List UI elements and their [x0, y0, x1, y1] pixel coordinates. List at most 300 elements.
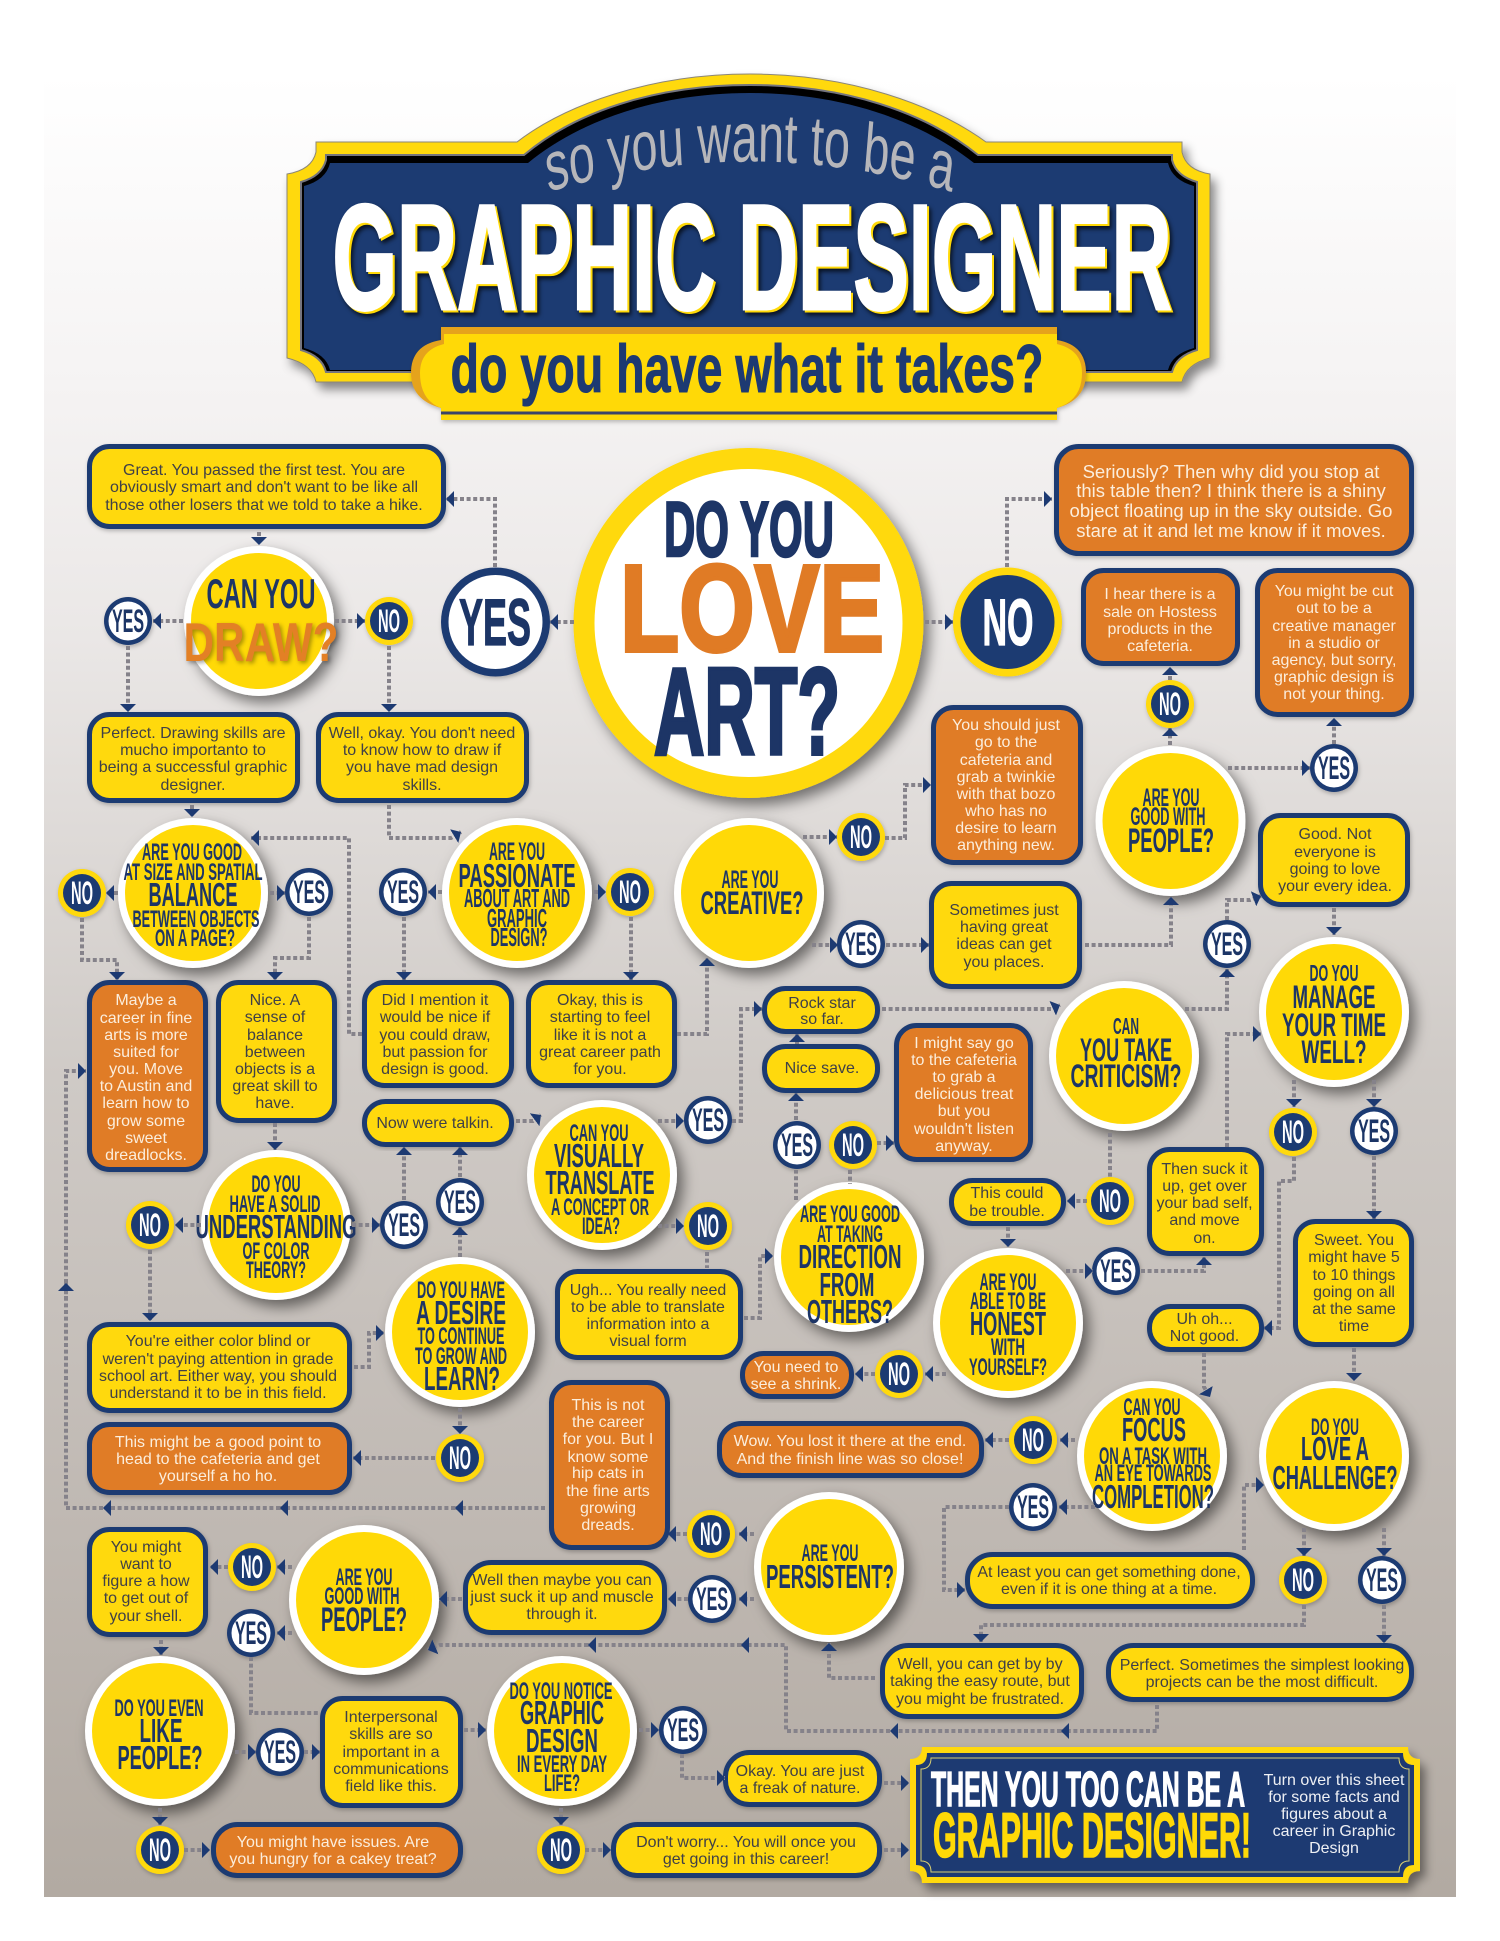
- box: sweet: [1296, 1222, 1412, 1344]
- answers: small no circles: [58, 597, 1327, 1874]
- question: visually translate: VISUALLY: [554, 1137, 644, 1174]
- answers: small no circles: NO: [149, 1832, 171, 1868]
- main circle: do you love art: ART?: [654, 644, 840, 781]
- box: seriously: object floating up in the sky outside. Go: [1070, 500, 1392, 521]
- box: now were talkin: [364, 1102, 512, 1144]
- box: this is not the career: This is not: [572, 1397, 645, 1414]
- answers: small yes circles: YES: [696, 1581, 728, 1617]
- main circle: do you love art: DO YOU: [664, 485, 834, 573]
- question: good with people 2: PEOPLE?: [321, 1601, 407, 1639]
- question: desire: [385, 1257, 535, 1407]
- question: persistent: PERSISTENT?: [766, 1558, 894, 1595]
- box: then suck it up: on.: [1193, 1230, 1216, 1247]
- big answer: yes: [441, 568, 550, 676]
- ribbon: do you have what it takes: [411, 327, 1086, 420]
- question: balance: ARE YOU GOOD: [142, 839, 242, 866]
- box: you should just: grab a twinkie: [957, 769, 1055, 786]
- question: do you even like people: DO YOU EVEN: [114, 1695, 204, 1722]
- box: you should just: cafeteria and: [960, 752, 1052, 769]
- question: creative: ARE YOU: [722, 866, 778, 894]
- question: good with people: GOOD WITH: [1130, 803, 1206, 831]
- question: honest: HONEST: [970, 1305, 1046, 1342]
- question: good with people: ARE YOU: [1142, 784, 1200, 812]
- box: i might say: I might say go: [914, 1035, 1014, 1052]
- box: okay just a freak: Okay. You are just: [736, 1763, 865, 1780]
- main circle: do you love art: [574, 448, 924, 798]
- box: rock star: so far.: [800, 1011, 844, 1028]
- question: focus: AN EYE TOWARDS: [1094, 1460, 1212, 1487]
- big answer: no: NO: [982, 585, 1034, 659]
- box: ugh: Ugh... You really need: [570, 1282, 726, 1299]
- box: don't worry: Don't worry... You will once you: [636, 1834, 856, 1851]
- box: i hear: products in the: [1108, 621, 1213, 638]
- box: maybe a career: Maybe a: [115, 992, 177, 1009]
- box: uh oh: Uh oh...: [1176, 1311, 1233, 1328]
- box: ugh: visual form: [609, 1333, 687, 1350]
- final banner: career in Graphic: [1273, 1823, 1395, 1840]
- box: sweet: at the same: [1312, 1301, 1396, 1318]
- box: i might say: anyway.: [935, 1138, 993, 1155]
- box: uh oh: Not good.: [1170, 1328, 1239, 1345]
- big answer: yes: YES: [459, 585, 531, 659]
- question: understanding: THEORY?: [246, 1257, 306, 1284]
- question: notice graphic design: DESIGN: [526, 1722, 598, 1759]
- box: this might be a good point: [90, 1424, 350, 1492]
- question: visually translate: IDEA?: [582, 1213, 620, 1240]
- box: i might say: to grab a: [932, 1069, 996, 1086]
- question: direction: AT TAKING: [817, 1221, 883, 1248]
- box: did i mention: would be nice if: [379, 1009, 491, 1026]
- answers: small yes circles: YES: [388, 1207, 420, 1243]
- box: sweet: might have 5: [1308, 1249, 1400, 1266]
- box: you might be cut: out to be a: [1296, 600, 1372, 617]
- answers: small no circles: NO: [1292, 1562, 1314, 1598]
- question: visually translate: A CONCEPT OR: [551, 1194, 649, 1221]
- final banner: for some facts and: [1268, 1789, 1400, 1806]
- box: you might be cut: not your thing.: [1283, 686, 1385, 703]
- box: well you can get by: [882, 1646, 1082, 1716]
- box: i hear: sale on Hostess: [1103, 604, 1217, 621]
- box: maybe a career: you. Move: [109, 1061, 183, 1078]
- question: passionate: [442, 818, 592, 968]
- answers: small no circles: NO: [842, 1127, 864, 1163]
- box: well okay: to know how to draw if: [343, 742, 502, 759]
- box: you're either color blind: [90, 1324, 350, 1410]
- box: maybe a career: to Austin and: [100, 1078, 192, 1095]
- box: you're either color blind: understand it to be in this field.: [109, 1385, 327, 1402]
- text: so you want to be a: so you want to be a: [546, 118, 952, 192]
- box: interpersonal skills: important in a: [343, 1744, 440, 1761]
- box: nice save: Nice save.: [785, 1060, 859, 1077]
- box: well you can get by: you might be frustrated.: [896, 1691, 1064, 1708]
- box: okay this is starting: for you.: [573, 1061, 627, 1078]
- answers: small no circles: NO: [71, 875, 93, 911]
- answers: small no circles: NO: [1099, 1183, 1121, 1219]
- question: passionate: GRAPHIC: [487, 903, 547, 933]
- question: criticism: CRITICISM?: [1070, 1058, 1182, 1094]
- box: seriously: this table then? I think there is a shiny: [1076, 480, 1387, 501]
- question: can you draw: CAN YOU: [206, 570, 316, 617]
- box: uh oh: [1150, 1306, 1262, 1350]
- question: direction: FROM: [820, 1266, 874, 1303]
- box: this is not the career: for you. But I: [563, 1431, 653, 1448]
- final banner: [910, 1747, 1420, 1883]
- box: well okay: Well, okay. You don't need: [329, 725, 515, 742]
- question: good with people: [1096, 746, 1246, 896]
- box: interpersonal skills: field like this.: [345, 1778, 437, 1795]
- box: at least: [968, 1554, 1252, 1606]
- box: good not everyone: Good. Not: [1299, 826, 1372, 843]
- answers: small yes circles: YES: [235, 1615, 267, 1651]
- answers: small yes circles: YES: [781, 1127, 813, 1163]
- question: desire: TO CONTINUE: [418, 1323, 504, 1350]
- box: rock star: Rock star: [788, 995, 856, 1012]
- question: focus: CAN YOU: [1124, 1394, 1180, 1421]
- question: visually translate: [527, 1100, 677, 1250]
- flow arrows: dotted connectors with arrowheads: [66, 499, 1384, 1850]
- box: okay this is starting: like it is not a: [554, 1027, 646, 1044]
- answers: small no circles: NO: [700, 1516, 722, 1552]
- answers: small no circles: NO: [378, 603, 400, 639]
- box: you're either color blind: You're either color blind or: [126, 1333, 311, 1350]
- box: interpersonal skills: Interpersonal: [344, 1709, 438, 1726]
- box: don't worry: [614, 1824, 880, 1876]
- question: desire: A DESIRE: [416, 1294, 506, 1331]
- final banner: Design: [1309, 1840, 1359, 1857]
- question: notice graphic design: [487, 1656, 637, 1806]
- box: this is not the career: the career: [572, 1414, 645, 1431]
- box: well then maybe: Well then maybe you can: [472, 1572, 652, 1589]
- box: nice a sense: have.: [255, 1095, 295, 1112]
- box: you need to see a shrink: see a shrink.: [751, 1376, 841, 1393]
- question: focus: [1077, 1381, 1227, 1531]
- box: this might be a good point: This might be a good point to: [115, 1434, 321, 1451]
- question: visually translate: CAN YOU: [570, 1120, 628, 1147]
- question: passionate: PASSIONATE: [458, 857, 576, 894]
- box: well then maybe: [466, 1562, 664, 1632]
- box: then suck it up: Then suck it: [1161, 1161, 1248, 1178]
- box: rock star: [764, 988, 878, 1032]
- box: seriously: Seriously? Then why did you stop at: [1083, 461, 1379, 482]
- box: then suck it up: and move: [1169, 1212, 1240, 1229]
- question: balance: BETWEEN OBJECTS: [132, 906, 260, 933]
- box: you should just: who has no: [964, 803, 1047, 820]
- question: passionate: DESIGN?: [490, 922, 548, 952]
- answers: small yes circles: YES: [293, 874, 325, 910]
- question: good with people: PEOPLE?: [1128, 822, 1214, 860]
- question: passionate: ABOUT ART AND: [464, 883, 570, 913]
- answers: small yes circles: YES: [387, 874, 419, 910]
- box: you might be cut: You might be cut: [1275, 583, 1394, 600]
- box: you might have issues: [214, 1824, 460, 1876]
- box: ugh: information into a: [587, 1316, 709, 1333]
- answers: small yes circles: YES: [1358, 1113, 1390, 1149]
- box: you're either color blind: school art. Either way, you should: [99, 1368, 337, 1385]
- box: ugh: [558, 1272, 740, 1358]
- question: visually translate: TRANSLATE: [546, 1164, 654, 1201]
- box: great: Great. You passed the first test. You are: [123, 462, 405, 479]
- box: perfect sometimes: projects can be the most difficult.: [1146, 1674, 1378, 1691]
- question: honest: [933, 1248, 1083, 1398]
- question: do you even like people: PEOPLE?: [118, 1739, 202, 1776]
- box: great: [90, 446, 444, 526]
- box: you should just: with that bozo: [956, 786, 1055, 803]
- question: challenge: DO YOU: [1311, 1414, 1359, 1441]
- question: honest: ABLE TO BE: [970, 1288, 1046, 1315]
- box: at least: even if it is one thing at a time.: [1001, 1581, 1217, 1598]
- box: you should just: anything new.: [957, 837, 1055, 854]
- question: understanding: OF COLOR: [242, 1238, 310, 1265]
- box: maybe a career: career in fine: [100, 1010, 192, 1027]
- answers: small no circles: NO: [850, 819, 872, 855]
- box: maybe a career: grow some: [107, 1113, 185, 1130]
- box: you should just: go to the: [975, 734, 1037, 751]
- box: this is not the career: [552, 1382, 668, 1548]
- answers: small yes circles: YES: [845, 926, 877, 962]
- box: you might be cut: graphic design is: [1274, 669, 1394, 686]
- box: okay this is starting: starting to feel: [550, 1009, 650, 1026]
- box: did i mention: design is good.: [381, 1061, 489, 1078]
- box: nice a sense: Nice. A: [250, 992, 301, 1009]
- box: perfect sometimes: [1108, 1646, 1412, 1700]
- box: well then maybe: just suck it up and muscle: [469, 1589, 654, 1606]
- box: i might say: to the cafeteria: [911, 1052, 1017, 1069]
- box: okay this is starting: [528, 982, 674, 1086]
- box: well you can get by: Well, you can get by by: [897, 1656, 1063, 1673]
- box: you should just: You should just: [952, 717, 1061, 734]
- box: this is not the career: growing: [580, 1500, 636, 1517]
- answers: small yes circles: [104, 597, 1406, 1776]
- question: can you draw: [184, 546, 338, 696]
- answers: small no circles: NO: [1282, 1114, 1304, 1150]
- box: did i mention: but passion for: [383, 1044, 488, 1061]
- box: you might want to figure: figure a how: [102, 1573, 190, 1590]
- box: interpersonal skills: communications: [333, 1761, 449, 1778]
- box: you might be cut: [1258, 570, 1412, 714]
- question: criticism: YOU TAKE: [1080, 1032, 1172, 1068]
- box: you might want to figure: want to: [119, 1556, 172, 1573]
- box: then suck it up: up, get over: [1162, 1178, 1247, 1195]
- box: you should just: desire to learn: [955, 820, 1057, 837]
- big answer: no: [953, 568, 1062, 676]
- box: perfect drawing: being a successful graphic: [99, 759, 287, 776]
- question: notice graphic design: DO YOU NOTICE: [510, 1678, 612, 1705]
- answers: small no circles: NO: [241, 1549, 263, 1585]
- box: sometimes: Sometimes just: [949, 902, 1059, 919]
- box: you might want to figure: You might: [111, 1539, 182, 1556]
- box: sometimes: [932, 884, 1080, 986]
- box: nice a sense: [218, 982, 334, 1120]
- box: seriously: [1056, 446, 1412, 554]
- answers: small yes circles: YES: [1211, 926, 1243, 962]
- answers: small yes circles: YES: [692, 1102, 724, 1138]
- question: focus: FOCUS: [1122, 1411, 1186, 1448]
- box: i might say: [896, 1026, 1030, 1160]
- question: honest: YOURSELF?: [969, 1354, 1047, 1381]
- box: you might want to figure: to get out of: [104, 1590, 189, 1607]
- answers: small yes circles: YES: [667, 1712, 699, 1748]
- box: okay just a freak: a freak of nature.: [740, 1780, 860, 1797]
- box: did i mention: [364, 982, 512, 1086]
- question: challenge: CHALLENGE?: [1272, 1459, 1398, 1496]
- box: did i mention: Did I mention it: [382, 992, 489, 1009]
- box: good not everyone: [1260, 816, 1408, 904]
- question: understanding: HAVE A SOLID: [230, 1191, 320, 1218]
- question: balance: [118, 818, 268, 968]
- answers: small no circles: NO: [888, 1356, 910, 1392]
- box: sweet: time: [1339, 1318, 1369, 1335]
- answers: small no circles: NO: [550, 1832, 572, 1868]
- box: maybe a career: sweet: [125, 1130, 167, 1147]
- box: this could be trouble: This could: [971, 1185, 1043, 1202]
- box: maybe a career: learn how to: [102, 1095, 190, 1112]
- box: i might say: wouldn't listen: [913, 1121, 1014, 1138]
- box: sometimes: having great: [960, 919, 1049, 936]
- question: manage your time: [1259, 937, 1409, 1087]
- box: wow you lost it: Wow. You lost it there at the end.: [734, 1433, 966, 1450]
- question: creative: CREATIVE?: [700, 885, 804, 921]
- banner plaque: [287, 74, 1210, 382]
- box: okay this is starting: great career path: [539, 1044, 661, 1061]
- box: you should just: [934, 708, 1080, 862]
- box: good not everyone: going to love: [1290, 861, 1380, 878]
- answers: small yes circles: YES: [112, 603, 144, 639]
- question: balance: ON A PAGE?: [155, 925, 235, 952]
- box: maybe a career: arts is more: [104, 1027, 188, 1044]
- box: wow you lost it: [720, 1424, 982, 1476]
- box: sweet: Sweet. You: [1314, 1232, 1394, 1249]
- box: perfect drawing: Perfect. Drawing skills are: [101, 725, 286, 742]
- box: then suck it up: [1150, 1150, 1262, 1254]
- box: you might be cut: agency, but sorry,: [1272, 652, 1396, 669]
- box: perfect drawing: designer.: [161, 777, 225, 794]
- question: challenge: [1259, 1381, 1409, 1531]
- question: understanding: [196, 1150, 356, 1300]
- box: you might have issues: you hungry for a cakey treat?: [229, 1851, 437, 1868]
- question: good with people 2: ARE YOU: [336, 1564, 392, 1591]
- box: i hear: cafeteria.: [1127, 638, 1193, 655]
- question: understanding: DO YOU: [252, 1171, 300, 1198]
- box: this could be trouble: be trouble.: [969, 1203, 1045, 1220]
- answers: small yes circles: YES: [1318, 750, 1350, 786]
- box: at least: At least you can get something done,: [977, 1564, 1241, 1581]
- box: you might have issues: You might have issues. Are: [237, 1834, 429, 1851]
- box: you might be cut: creative manager: [1272, 618, 1396, 635]
- box: this is not the career: know some: [568, 1449, 649, 1466]
- question: criticism: [1049, 981, 1199, 1131]
- question: desire: DO YOU HAVE: [417, 1277, 505, 1304]
- box: seriously: stare at it and let me know if it moves.: [1076, 520, 1386, 541]
- box: sweet: going on all: [1313, 1284, 1395, 1301]
- box: perfect sometimes: Perfect. Sometimes the simplest looking: [1120, 1657, 1404, 1674]
- question: manage your time: MANAGE: [1292, 979, 1376, 1015]
- question: can you draw: DRAW?: [184, 611, 338, 673]
- answers: small no circles: NO: [139, 1207, 161, 1243]
- box: sometimes: ideas can get: [956, 936, 1052, 953]
- box: this might be a good point: yourself a ho ho.: [159, 1468, 277, 1485]
- box: good not everyone: your every idea.: [1278, 878, 1392, 895]
- question: direction: [774, 1182, 924, 1332]
- question: honest: ARE YOU: [980, 1269, 1036, 1296]
- answers: small yes circles: YES: [264, 1734, 296, 1770]
- box: great: obviously smart and don't want to be like all: [110, 479, 418, 496]
- box: now were talkin: Now were talkin.: [376, 1115, 494, 1132]
- box: i might say: delicious treat: [915, 1086, 1014, 1103]
- answers: small no circles: NO: [1159, 686, 1181, 722]
- answers: small yes circles: YES: [444, 1184, 476, 1220]
- answers: small no circles: NO: [619, 874, 641, 910]
- box: well okay: [318, 714, 526, 800]
- question: persistent: ARE YOU: [802, 1540, 858, 1567]
- box: great: those other losers that we told to take a hike.: [105, 497, 423, 514]
- box: maybe a career: [90, 982, 206, 1170]
- box: you need to see a shrink: [742, 1354, 852, 1396]
- question: direction: ARE YOU GOOD: [800, 1201, 900, 1228]
- ribbon: do you have what it takes: do you have what it takes?: [450, 331, 1044, 407]
- box: don't worry: get going in this career!: [663, 1851, 829, 1868]
- box: interpersonal skills: [322, 1698, 460, 1806]
- main circle: do you love art: LOVE: [620, 541, 884, 678]
- box: you might want to figure: your shell.: [110, 1608, 182, 1625]
- question: understanding: UNDERSTANDING: [196, 1208, 356, 1245]
- question: do you even like people: LIKE: [140, 1712, 182, 1749]
- box: then suck it up: your bad self,: [1156, 1195, 1253, 1212]
- question: good with people 2: [289, 1525, 439, 1675]
- box: nice a sense: balance: [247, 1027, 303, 1044]
- box: this is not the career: hip cats in: [572, 1465, 644, 1482]
- final banner: figures about a: [1281, 1806, 1387, 1823]
- box: well okay: skills.: [402, 777, 442, 794]
- answers: small yes circles: YES: [1017, 1489, 1049, 1525]
- question: honest: WITH: [991, 1334, 1025, 1361]
- box: good not everyone: everyone is: [1294, 844, 1376, 861]
- box: you might be cut: in a studio or: [1288, 635, 1380, 652]
- question: manage your time: YOUR TIME: [1282, 1007, 1386, 1043]
- box: well then maybe: through it.: [526, 1606, 598, 1623]
- box: nice a sense: great skill to: [232, 1078, 318, 1095]
- box: perfect drawing: [90, 714, 298, 800]
- question: balance: AT SIZE AND SPATIAL: [124, 859, 262, 886]
- question: notice graphic design: IN EVERY DAY: [517, 1751, 607, 1778]
- box: well you can get by: taking the easy route, but: [890, 1673, 1070, 1690]
- answers: small no circles: NO: [449, 1440, 471, 1476]
- box: did i mention: you could draw,: [379, 1027, 491, 1044]
- box: this is not the career: dreads.: [581, 1517, 635, 1534]
- box: maybe a career: dreadlocks.: [105, 1147, 187, 1164]
- box: maybe a career: suited for: [113, 1044, 180, 1061]
- box: sweet: to 10 things: [1313, 1267, 1395, 1284]
- question: challenge: LOVE A: [1301, 1430, 1369, 1467]
- question: persistent: [754, 1492, 904, 1642]
- box: sometimes: you places.: [964, 954, 1044, 971]
- box: you need to see a shrink: You need to: [754, 1359, 839, 1376]
- question: manage your time: DO YOU: [1310, 960, 1358, 986]
- question: desire: LEARN?: [424, 1360, 500, 1397]
- box: i hear: I hear there is a: [1104, 586, 1216, 603]
- box: perfect drawing: mucho importanto to: [120, 742, 266, 759]
- box: nice a sense: between: [245, 1044, 305, 1061]
- box: this is not the career: the fine arts: [566, 1483, 650, 1500]
- question: creative: [674, 818, 824, 968]
- box: well okay: you have mad design: [346, 759, 498, 776]
- question: good with people 2: GOOD WITH: [324, 1583, 400, 1610]
- answers: small no circles: NO: [1022, 1422, 1044, 1458]
- box: nice save: [764, 1046, 878, 1090]
- box: okay this is starting: Okay, this is: [557, 992, 643, 1009]
- box: this could be trouble: [952, 1180, 1064, 1224]
- box: i hear: [1084, 570, 1238, 664]
- box: nice a sense: sense of: [245, 1009, 306, 1026]
